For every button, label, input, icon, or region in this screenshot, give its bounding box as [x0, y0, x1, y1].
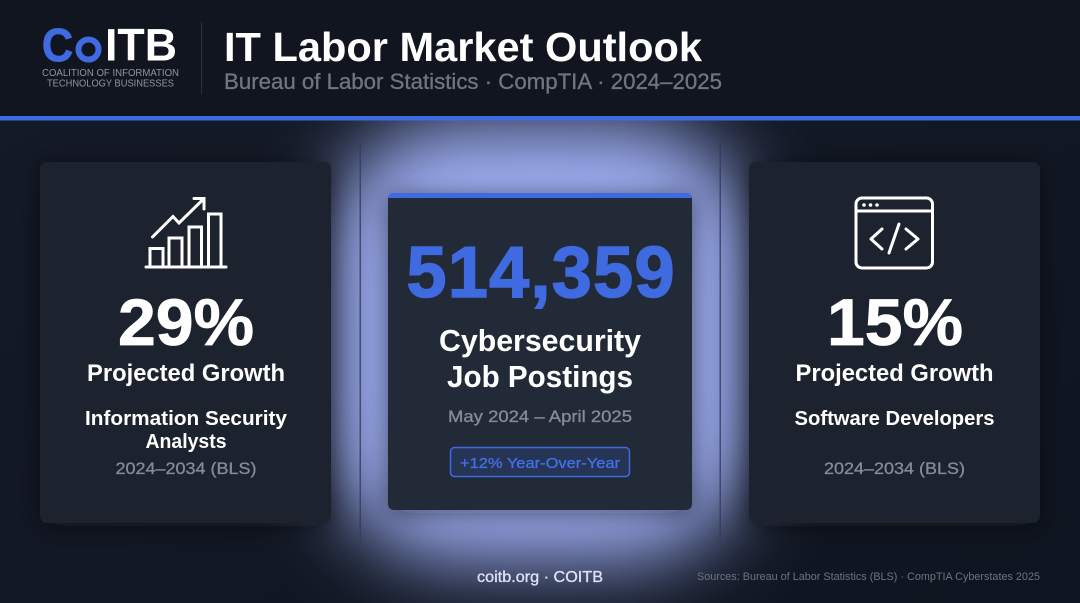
icon: growth bar chart — [146, 198, 226, 267]
heading: Job Postings — [447, 359, 633, 394]
logo: CoITB: TECHNOLOGY BUSINESSES — [47, 78, 174, 90]
central glow — [328, 122, 752, 562]
stat: 15%: 15% — [827, 285, 963, 359]
panel: cybersecurity job postings — [388, 193, 692, 510]
logo: CoITB: ITB — [105, 20, 177, 70]
label: role: Software Developers — [794, 408, 994, 430]
stat: 29%: 29% — [118, 285, 254, 359]
heading — [439, 323, 642, 394]
panel: information security analysts — [40, 162, 331, 523]
label: role — [85, 408, 288, 453]
footer sources: Sources: Bureau of Labor Statistics (BLS) · CompTIA Cyberstates 2025 — [697, 571, 1040, 583]
subtitle: Bureau of Labor Statistics · CompTIA · 2024–2025 — [224, 69, 722, 94]
footer site link: coitb.org · COITB — [477, 569, 603, 586]
header band — [0, 0, 1080, 120]
panel: software developers — [749, 162, 1040, 523]
label: period: 2024–2034 (BLS) — [116, 459, 256, 478]
header accent line — [0, 116, 1080, 120]
label: projected growth: Projected Growth — [87, 360, 285, 387]
date range: May 2024 – April 2025 — [448, 407, 632, 426]
panel top accent — [388, 193, 692, 199]
label: projected growth: Projected Growth — [796, 360, 994, 387]
logo: CoITB: COALITION OF INFORMATION — [42, 68, 179, 79]
label: period: 2024–2034 (BLS) — [824, 459, 965, 478]
label: role: Information Security — [85, 408, 288, 430]
logo: CoITB — [42, 19, 179, 90]
label: role: Analysts — [146, 431, 226, 453]
icon: code window — [856, 198, 932, 268]
badge: year over year: +12% Year-Over-Year — [460, 455, 620, 472]
stat: 514,359: 514,359 — [406, 233, 674, 313]
heading: Cybersecurity — [439, 323, 642, 358]
logo ring — [78, 40, 98, 60]
logo: CoITB: C — [42, 19, 73, 71]
title: IT Labor Market Outlook — [224, 24, 702, 70]
badge: year over year — [450, 448, 630, 476]
